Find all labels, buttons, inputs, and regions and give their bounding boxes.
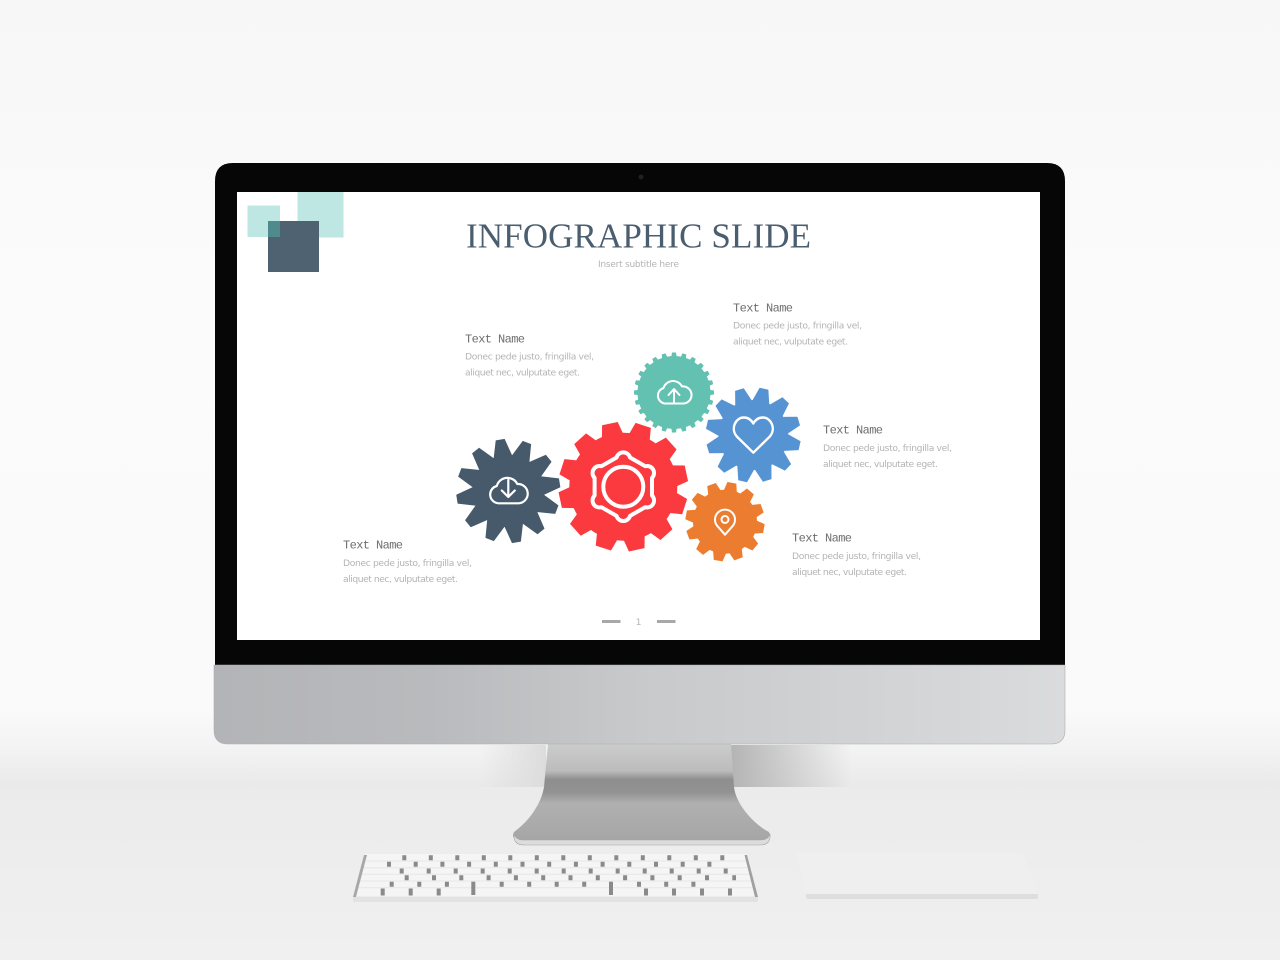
- page number: [602, 617, 676, 628]
- text block: right: [823, 424, 952, 470]
- text block: right: Donec pede justo, fringilla vel,: [823, 443, 952, 454]
- gear: red with cog icon: [558, 421, 689, 552]
- text block: lower left: [343, 538, 472, 585]
- monitor bezel: [215, 163, 1065, 665]
- text block: top center: Text Name: [465, 332, 525, 346]
- keyboard: [353, 854, 758, 902]
- slide screen: [237, 192, 1040, 640]
- text block: top right: Donec pede justo, fringilla vel,: [733, 320, 862, 332]
- trackpad: [797, 853, 1038, 899]
- stand shadow on the wall: [480, 745, 851, 787]
- text block: lower right: [792, 532, 921, 578]
- text block: lower right: Donec pede justo, fringilla vel,: [792, 551, 921, 562]
- text block: lower left: Donec pede justo, fringilla vel,: [343, 558, 472, 569]
- gear: navy with cloud download: [455, 438, 561, 544]
- monitor stand: [513, 744, 770, 845]
- gear: teal with cloud upload: [634, 352, 714, 432]
- page number: 1: [636, 617, 641, 628]
- text block: right: aliquet nec, vulputate eget.: [823, 459, 938, 470]
- icon: heart: [734, 418, 773, 453]
- text block: right: Text Name: [823, 424, 883, 438]
- text block: lower right: aliquet nec, vulputate eget.: [792, 567, 907, 578]
- icon: map pin: [715, 510, 735, 535]
- webcam: [639, 175, 643, 179]
- desk surface: [0, 787, 1280, 960]
- keyboard key gaps: [381, 858, 736, 895]
- keyboard row lines: [356, 861, 755, 888]
- text block: lower left: aliquet nec, vulputate eget.: [343, 574, 458, 585]
- icon: cloud upload: [658, 381, 692, 404]
- monitor chin: [214, 665, 1065, 744]
- text block: lower right: Text Name: [792, 532, 852, 546]
- subtitle: Insert subtitle here: [598, 260, 679, 270]
- monitor: [214, 163, 1065, 744]
- icon: cloud download: [490, 478, 528, 503]
- text block: top right: Text Name: [733, 301, 793, 315]
- text block: top center: aliquet nec, vulputate eget.: [465, 368, 580, 378]
- text block: top right: [733, 301, 862, 348]
- icon: cog: [593, 452, 654, 521]
- gear: orange with map pin: [685, 482, 765, 562]
- gear: blue with heart: [705, 387, 801, 483]
- text block: top center: Donec pede justo, fringilla vel,: [465, 352, 594, 362]
- decorative squares: [248, 192, 344, 272]
- text block: lower left: Text Name: [343, 538, 403, 552]
- text block: top center: [465, 332, 594, 378]
- text block: top right: aliquet nec, vulputate eget.: [733, 336, 848, 348]
- title: INFOGRAPHIC SLIDE: [466, 216, 811, 256]
